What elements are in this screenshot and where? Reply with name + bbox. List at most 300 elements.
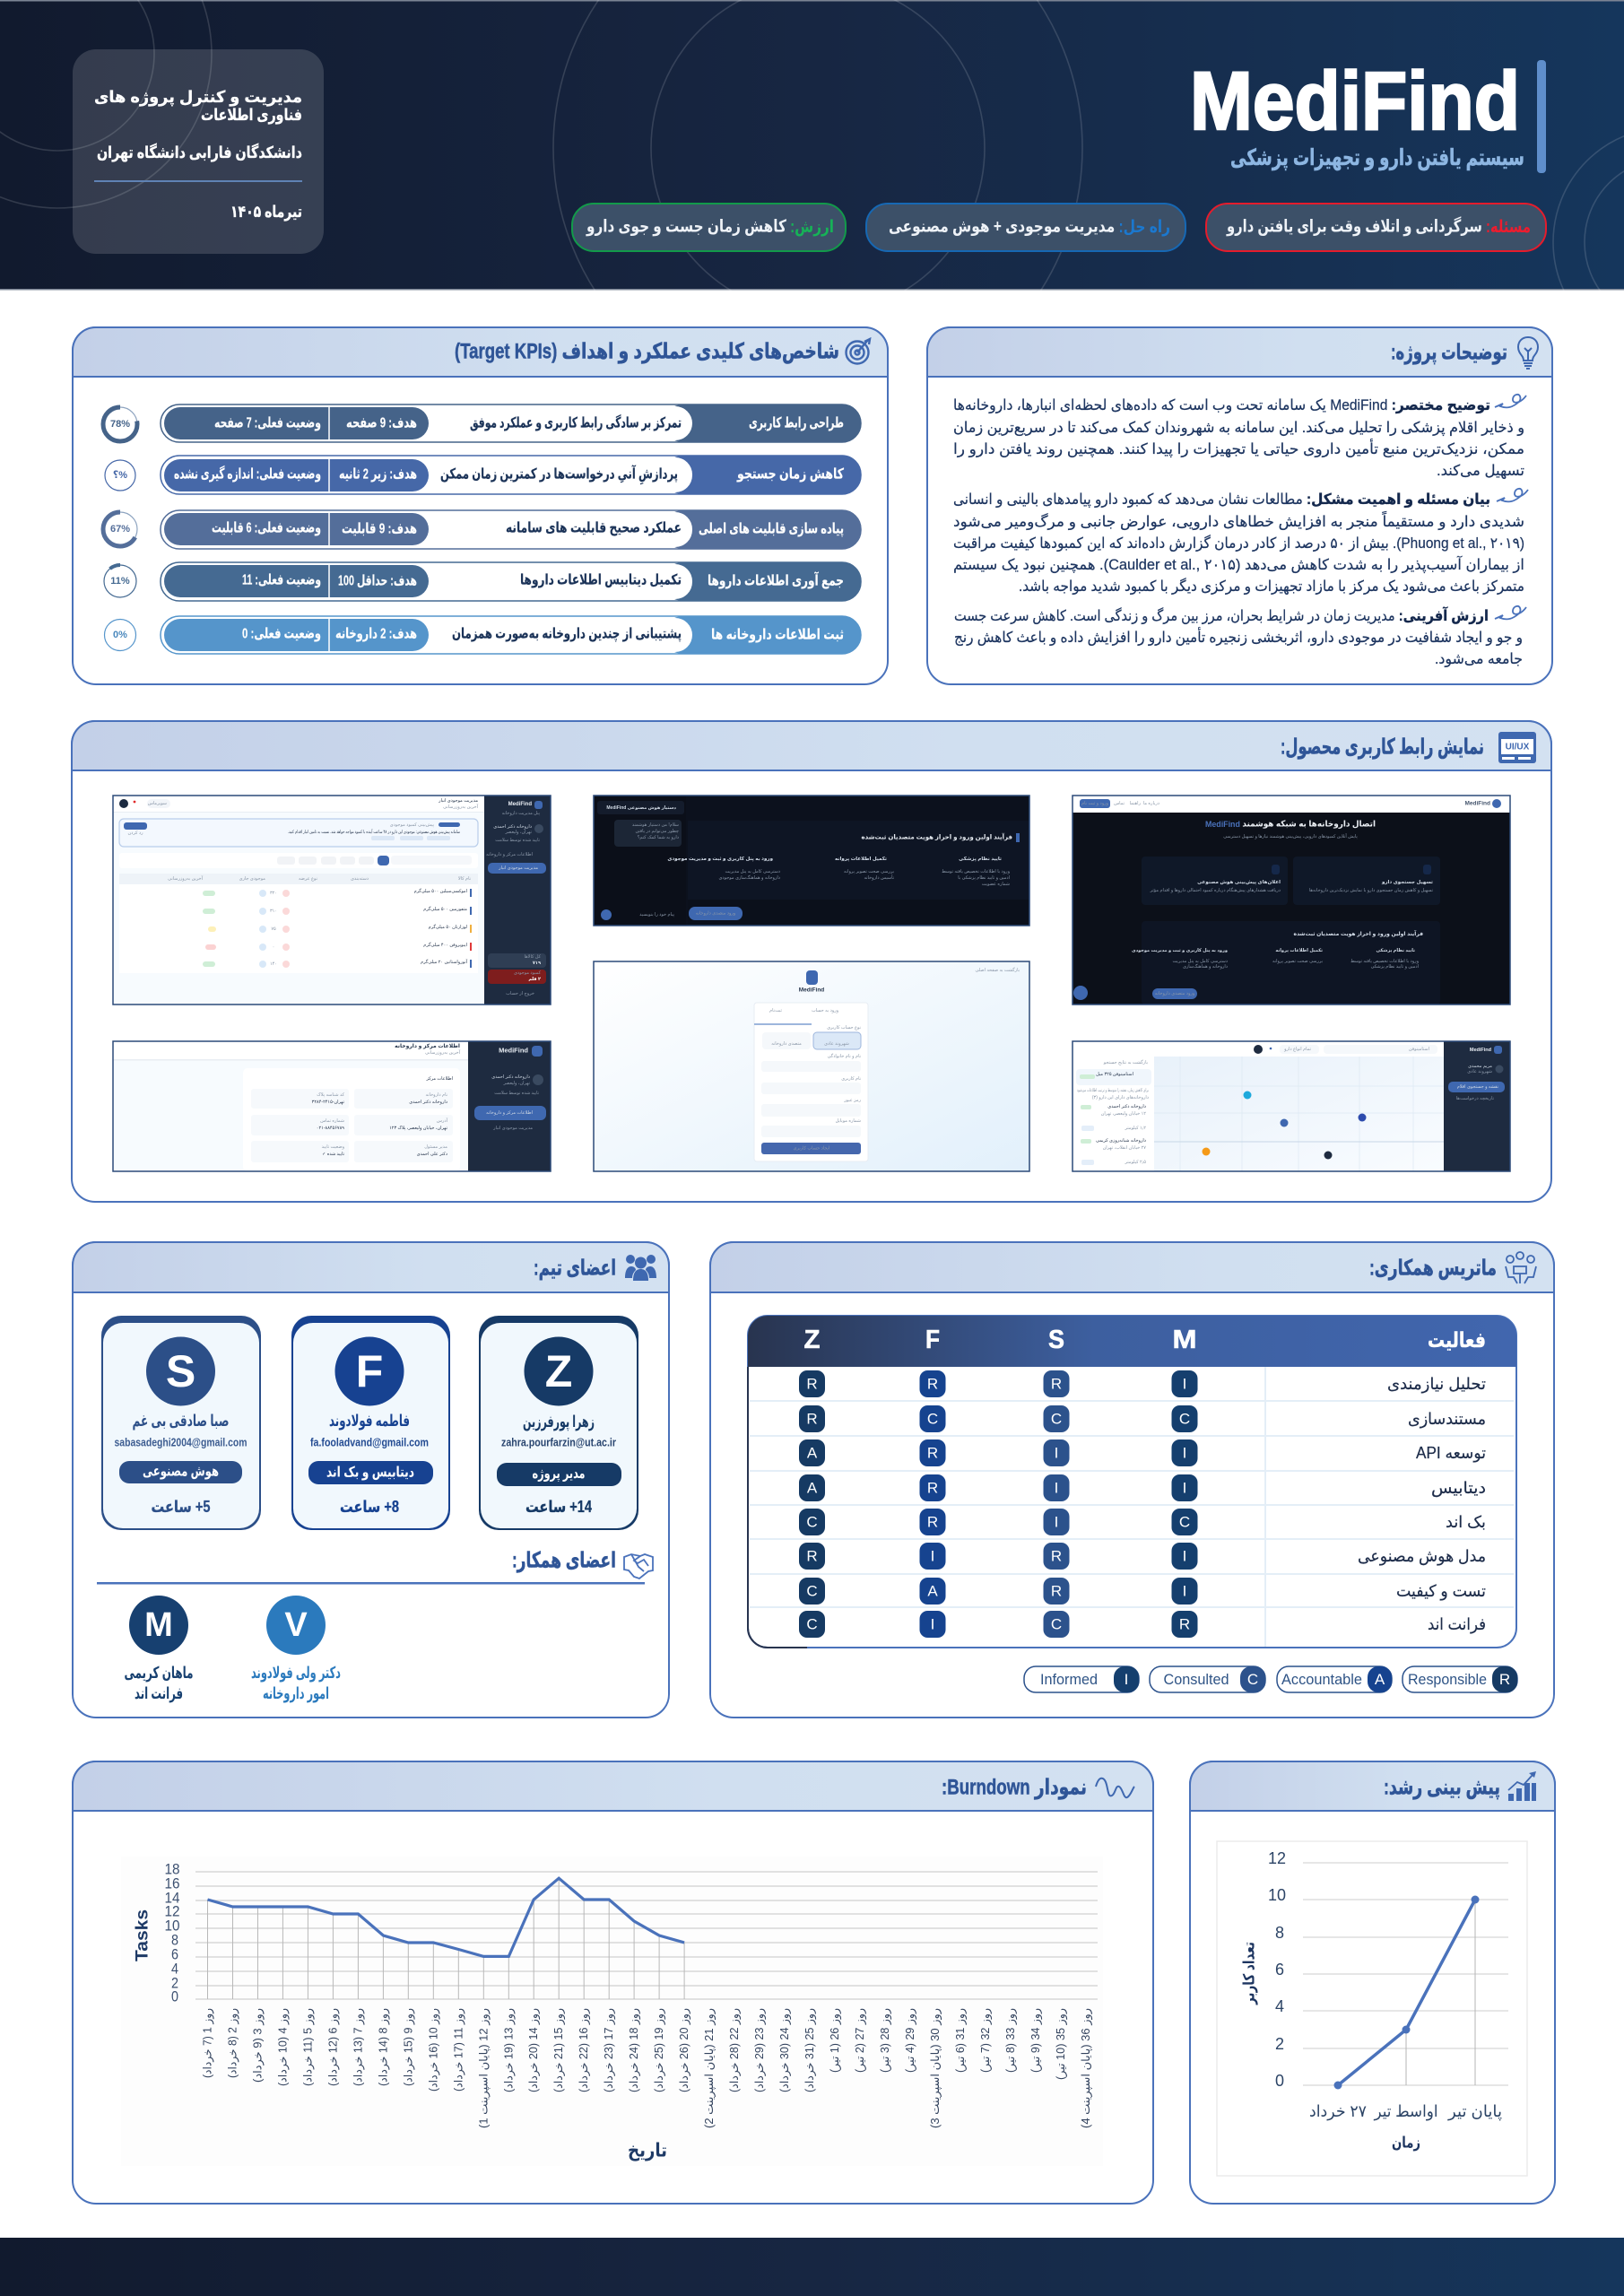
x axis labels: روز 25 (31 خرداد) <box>803 2008 817 2092</box>
x axis labels: روز 24 (30 خرداد) <box>778 2008 792 2092</box>
row labels: تحلیل نیازمندی <box>1387 1375 1486 1393</box>
KPI row 5 <box>161 616 861 654</box>
x axis labels: روز 26 (1 تیر) <box>829 2008 842 2073</box>
screenshot: map search: ۲۷ خیابان انقلاب، تهران <box>1103 1145 1146 1151</box>
screenshot: inventory dashboard: کمبود موجودی <box>514 970 542 976</box>
screenshot: map search: بازگشت به نتایج جستجو <box>1103 1059 1148 1065</box>
x axis labels: روز 4 (10 خرداد) <box>276 2008 290 2086</box>
x axis labels: روز 5 (11 خرداد) <box>301 2008 315 2086</box>
screenshot: inventory dashboard: ۰ <box>273 944 274 950</box>
panel: growth forecast <box>1190 1761 1555 2204</box>
screenshot: inventory dashboard: متفورمین ۵۰۰ میلی‌گرم <box>423 906 467 912</box>
course info card <box>73 49 324 254</box>
column F chips: A <box>927 1582 938 1600</box>
screenshot: landing page: درباره ما <box>1143 801 1159 806</box>
screenshot: landing page <box>1073 796 1510 1004</box>
collaborator: Mahan: فرانت اند <box>135 1684 183 1703</box>
screenshot: map search: داروخانه دکتر احمدی <box>1107 1104 1146 1109</box>
screenshot: landing page: دریافت هشدارهای پیش‌هنگام درباره کمبود احتمالی داروها و اقدام مؤثر <box>1150 887 1281 893</box>
column S chips: R <box>1051 1582 1062 1600</box>
y axis labels: 2 <box>1275 2035 1284 2053</box>
icon: UI/UX window: UI/UX <box>1506 743 1530 752</box>
column S chips: C <box>1051 1616 1062 1632</box>
text: problem statement: (Phuong et al., ۲۰۱۹). بیش از ۵۰ درصد از کادر درمان گزارش داده‌اند که این کمبودها کیفیت مراقبت <box>953 535 1524 552</box>
row labels: مدل هوش مصنوعی <box>1358 1547 1486 1566</box>
screenshot: onboarding process with chat: ورود به پنل کاربری و ثبت و مدیریت موجودی <box>667 856 774 862</box>
x axis labels: روز 36 (پایان اسپرینت 4) <box>1080 2008 1093 2128</box>
KPI row 2: کاهش زمان جستجو <box>736 466 845 483</box>
screenshot: sign-up form <box>594 961 1029 1171</box>
screenshot: pharmacy information: تایید شده ✓ <box>322 1152 345 1157</box>
team card: Saba: ‎+5 ساعت <box>151 1498 210 1516</box>
screenshot: inventory dashboard: پنل مدیریت داروخانه <box>502 811 541 816</box>
y axis labels: 8 <box>171 1932 178 1948</box>
screenshot: pharmacy information: داروخانه دکتر احمدی <box>409 1100 447 1105</box>
screenshot: map search: ۱۲ خیابان ولیعصر، تهران <box>1101 1111 1146 1117</box>
course info card: دانشکدگان فارابی دانشگاه تهران <box>97 143 302 162</box>
legend: Informed <box>1040 1671 1098 1688</box>
screenshot: onboarding process with chat: دسترسی کامل به پنل مدیریت <box>725 869 780 874</box>
KPI row 4: هدف: حداقل 100 <box>338 574 417 588</box>
panel: project description <box>927 327 1552 684</box>
legend: Responsible <box>1408 1671 1487 1688</box>
progress ring 67% <box>103 512 137 546</box>
screenshot: map search: تاریخچه درخواست‌ها <box>1456 1096 1495 1101</box>
course info card: تیرماه ۱۴۰۵ <box>230 203 302 222</box>
x axis labels: روز 30 (پایان اسپرینت 3) <box>929 2008 942 2128</box>
y axis labels: 0 <box>1275 2072 1284 2090</box>
y axis labels: 16 <box>165 1874 179 1892</box>
screenshot: landing page: اتصال داروخانه‌ها به شبکه هوشمند MediFind <box>1205 820 1376 829</box>
KPI row 5: ثبت اطلاعات داروخانه ها <box>711 628 844 642</box>
KPI row 3: عملکرد صحیح قابلیت های سامانه <box>506 520 682 536</box>
column M chips <box>1171 1370 1198 1638</box>
screenshot: map search: ۲٫۵ کیلومتر <box>1125 1160 1146 1165</box>
column F chips <box>920 1370 945 1638</box>
KPI row 3: هدف: 9 قابلیت <box>342 522 417 536</box>
screenshot: sign-up form: شهروند عادی <box>824 1041 849 1047</box>
screenshot: inventory dashboard: ۱۴۰ <box>270 961 277 967</box>
line chart: user growth <box>1217 1841 1527 2176</box>
screenshot: onboarding process with chat: فرآیند اولین ورود و احراز هویت متصدیان ثبت‌شده <box>861 832 1012 841</box>
column M chips: I <box>1183 1376 1186 1392</box>
team card: Zahra: مدیر پروژه <box>533 1466 585 1483</box>
collaborator: Mahan: ماهان کریمی <box>124 1664 194 1683</box>
burndown line <box>208 1878 684 1956</box>
screenshot: inventory dashboard: ۳۱۰ <box>270 909 277 914</box>
icon: team <box>625 1255 656 1281</box>
team card: Saba <box>101 1316 261 1530</box>
x axis labels: روز 34 (9 تیر) <box>1029 2008 1043 2073</box>
x axis labels: روز 7 (13 خرداد) <box>352 2008 365 2086</box>
subtitle: سیستم یافتن دارو و تجهیزات پزشکی <box>1230 145 1524 171</box>
x axis labels: روز 3 (9 خرداد) <box>251 2008 265 2083</box>
collaborator: Dr. Vali: دکتر ولی فولادوند <box>251 1664 341 1683</box>
pill: solution: راه حل: مدیریت موجودی + هوش مصنوعی <box>889 217 1170 237</box>
icon: target <box>847 339 870 364</box>
screenshot: inventory dashboard: نام کالا <box>458 876 471 882</box>
collaborator: Dr. Vali: امور داروخانه <box>263 1684 329 1703</box>
screenshot: pharmacy information: ۰۲۱-۸۸۴۵۶۷۸۹ <box>317 1126 344 1131</box>
x axis labels: روز 12 (پایان اسپرینت 1) <box>477 2008 491 2128</box>
screenshot: onboarding process with chat: تکمیل اطلاعات پروانه <box>835 856 887 862</box>
screenshot: sign-up form: رمز عبور <box>843 1098 862 1103</box>
course info card: فناوری اطلاعات <box>201 106 302 125</box>
screenshot: landing page: داروخانه و هماهنگ‌سازی <box>1183 963 1228 970</box>
screenshot: pharmacy information: مدیریت موجودی انبار <box>492 1126 533 1131</box>
heading: burndown: نمودار Burndown: <box>942 1776 1087 1799</box>
text: short description: تسهیل می‌کند. <box>1437 463 1524 480</box>
column S chips: R <box>1051 1376 1062 1392</box>
team card: Zahra: ‎+14 ساعت <box>525 1498 592 1516</box>
team card: Saba: هوش مصنوعی <box>143 1464 219 1480</box>
icon: burndown curve <box>1096 1779 1134 1797</box>
RACI table <box>748 1316 1516 1648</box>
KPI row 1: هدف: 9 صفحه <box>346 416 417 430</box>
x axis labels: روز 20 (26 خرداد) <box>678 2008 691 2092</box>
column Z chips: R <box>806 1548 818 1564</box>
column M chips: R <box>1179 1616 1190 1632</box>
table header row: M <box>1173 1326 1196 1354</box>
KPI row 4: وضعیت فعلی: 11 <box>242 572 321 588</box>
KPI row 1 <box>161 404 861 442</box>
x axis labels: روز 1 (7 خرداد) <box>201 2008 215 2078</box>
x axis labels: روز 33 (8 تیر) <box>1004 2008 1018 2073</box>
pill: value <box>572 204 846 251</box>
team card: Zahra: زهرا پورفرزین <box>523 1413 595 1431</box>
screenshot: inventory dashboard: داروخانه دکتر احمدی <box>493 824 532 830</box>
column M chips: I <box>1183 1444 1186 1462</box>
screenshot: pharmacy information: تهران-۲۴۱۵-۳۲۸۴ <box>312 1100 345 1105</box>
heading: KPIs: شاخص‌های کلیدی عملکرد و اهداف (Target KPIs) <box>455 339 839 364</box>
screenshot: inventory dashboard <box>113 796 551 1004</box>
screenshot: inventory dashboard: آخرین به‌روزرسانی <box>168 875 204 882</box>
column M chips: I <box>1183 1480 1186 1496</box>
screenshot: pharmacy information: MediFind <box>499 1046 528 1055</box>
heading: team: اعضای تیم: <box>534 1256 616 1281</box>
screenshot: onboarding process with chat: چطور می‌توانم در یافتن <box>635 829 679 834</box>
x axis title: تاریخ <box>628 2140 667 2161</box>
screenshot: landing page: اعلان‌های پیش‌بینی هوش مصنوعی <box>1197 880 1281 885</box>
KPI row 5: هدف: 2 داروخانه <box>335 626 417 642</box>
column Z chips: R <box>806 1410 818 1428</box>
screenshot: onboarding process with chat: بررسی صحت تصویر پروانه <box>844 869 894 874</box>
x axis labels: روز 28 (3 تیر) <box>879 2008 892 2073</box>
table header row: فعالیت <box>1428 1328 1486 1352</box>
x axis labels: روز 23 (29 خرداد) <box>753 2008 767 2092</box>
screenshot: inventory dashboard: ایبوپروفن ۴۰۰ میلی‌گرم <box>423 942 467 948</box>
screenshot: pharmacy information <box>113 1041 551 1171</box>
screenshot: landing page: ورود متصدی داروخانه <box>1155 991 1195 996</box>
heading: collaboration matrix: ماتریس همکاری: <box>1369 1256 1497 1281</box>
team card: Fatemeh <box>291 1316 450 1530</box>
team card: Zahra: zahra.pourfarzin@ut.ac.ir <box>501 1435 616 1449</box>
screenshot: landing page: ادمین و تایید نظام پزشکی <box>1371 964 1419 970</box>
screenshot: landing page: تسهیل و کاهش زمان جستجوی دارو با نمایش نزدیک‌ترین داروخانه‌ها <box>1309 888 1434 893</box>
screenshot: sign-up form: متصدی داروخانه <box>771 1041 802 1047</box>
screenshot: onboarding process with chat: پیام خود را بنویسید <box>639 912 675 918</box>
x axis labels: روز 19 (25 خرداد) <box>653 2008 666 2092</box>
row labels: تست و کیفیت <box>1396 1582 1486 1601</box>
KPI row 4 <box>161 562 861 601</box>
legend: A <box>1375 1671 1385 1688</box>
icon: swirl 3 <box>1495 606 1526 619</box>
y axis labels: 4 <box>1275 1997 1284 2015</box>
screenshot: sign-up form: MediFind <box>799 987 824 994</box>
screenshot: pharmacy information: آدرس <box>437 1118 448 1124</box>
screenshot: onboarding process with chat: سلام! من دستیار هوشمند <box>632 822 679 828</box>
column F chips: R <box>927 1480 938 1496</box>
screenshot: map search: نقشه و جستجوی اقلام <box>1457 1084 1498 1090</box>
screenshot: onboarding process with chat: تأسیس داروخانه <box>864 874 895 881</box>
table header row <box>803 1326 1486 1354</box>
panel: burndown chart <box>73 1761 1153 2204</box>
KPI row 1: تمرکز بر سادگی رابط کاربری و عملکرد موفق <box>470 414 682 430</box>
screenshot: sign-up form: نام کاربری <box>841 1076 861 1082</box>
x axis labels: روز 18 (24 خرداد) <box>628 2008 641 2092</box>
screenshot: map search: استامینوفن <box>1409 1047 1429 1052</box>
screenshot: landing page: ورود به پنل کاربری و ثبت و مدیریت موجودی <box>1132 948 1228 953</box>
screenshot: landing page: پایش آنلاین کمبودهای دارویی، پیش‌بینی هوشمند نیازها و تسهیل دسترسی <box>1223 833 1358 839</box>
screenshot: map search: برای کاهش زمان، نقشه را متوسط و ترتیب اطلاعات می‌شود <box>1077 1088 1149 1093</box>
team card: Zahra: Z <box>545 1346 572 1396</box>
screenshot: sign-up form: ثبت‌نام <box>769 1008 783 1013</box>
x axis labels: روز 9 (15 خرداد) <box>402 2008 415 2086</box>
x axis labels: روز 21 (پایان اسپرینت 2) <box>703 2008 716 2128</box>
screenshot: landing page: ورود و ثبت نام <box>1081 801 1109 806</box>
row labels: مستندسازی <box>1408 1410 1486 1428</box>
screenshot: pharmacy information: دکتر علی احمدی <box>417 1152 447 1157</box>
screenshot: onboarding process with chat: شماره عضویت <box>982 882 1010 887</box>
column Z chips: C <box>806 1616 818 1632</box>
KPI row 2 <box>161 456 861 494</box>
column S chips: R <box>1051 1548 1062 1564</box>
pill: value: ارزش: کاهش زمان جست و جوی دارو <box>586 217 834 237</box>
screenshot: inventory dashboard: ۷۵ <box>271 926 276 932</box>
KPI row 4: تکمیل دیتابیس اطلاعات داروها <box>520 572 682 588</box>
x axis labels <box>1309 2102 1502 2121</box>
column S chips <box>1044 1370 1069 1638</box>
x axis labels: روز 14 (20 خرداد) <box>527 2008 541 2092</box>
heading: product UI: نمایش رابط کاربری محصول: <box>1281 735 1484 759</box>
column S chips: I <box>1055 1480 1058 1496</box>
screenshot: map search: تمام انواع دارو <box>1283 1047 1312 1052</box>
screenshot: inventory dashboard: خروج از حساب <box>506 991 534 996</box>
column Z chips: C <box>806 1582 818 1600</box>
y axis labels: 14 <box>165 1889 179 1907</box>
screenshot: map search <box>1073 1041 1510 1171</box>
screenshot: landing page: MediFind <box>1464 800 1490 807</box>
screenshot: inventory dashboard: مدیریت موجودی انبار <box>498 865 538 871</box>
screenshot: pharmacy information: آخرین به‌روزرسانی <box>425 1049 461 1056</box>
x axis labels: روز 17 (23 خرداد) <box>603 2008 616 2092</box>
screenshot: landing page: بررسی صحت تصویر پروانه <box>1272 959 1323 964</box>
collaborator: Dr. Vali: V <box>284 1606 308 1644</box>
screenshot: inventory dashboard: آخرین به‌روزرسانی <box>443 804 479 810</box>
panel: collaboration matrix <box>710 1242 1554 1718</box>
screenshot: landing page: فرآیند اولین ورود و احراز هویت متصدیان ثبت‌شده <box>1294 929 1423 937</box>
screenshot: inventory dashboard: اموکسی‌سیلین ۵۰۰ میلی‌گرم <box>414 888 467 894</box>
y axis labels: 6 <box>171 1946 178 1962</box>
screenshot: sign-up form: نوع حساب کاربری <box>827 1025 861 1031</box>
panel: product UI showcase <box>72 721 1551 1202</box>
screenshot: inventory dashboard: آتورواستاتین ۲۰ میلی‌گرم <box>421 959 468 965</box>
KPI row 3 <box>161 510 861 549</box>
KPI row 2: وضعیت فعلی: اندازه گیری نشده <box>174 465 321 483</box>
screenshot: inventory dashboard: دسته‌بندی <box>351 876 369 882</box>
header banner <box>0 0 1624 413</box>
row labels: توسعه API <box>1416 1444 1486 1463</box>
screenshot: inventory dashboard: پیش‌بینی کمبود موجودی <box>390 822 435 828</box>
screenshot: map search: داروخانه‌های دارای این دارو (۳) <box>1092 1095 1149 1100</box>
screenshot: inventory dashboard: مدیریت موجودی انبار <box>438 798 478 804</box>
text: short description <box>953 397 1524 480</box>
icon: UI/UX window <box>1498 732 1536 763</box>
y axis labels: 2 <box>171 1975 178 1991</box>
screenshot: landing page: تکمیل اطلاعات پروانه <box>1275 948 1323 953</box>
table header row: Z <box>803 1326 820 1354</box>
screenshot: inventory dashboard: اطلاعات مرکز و داروخانه <box>486 852 533 857</box>
legend: R <box>1499 1671 1510 1688</box>
screenshot: onboarding process with chat <box>594 796 1029 926</box>
screenshot: landing page: تماس <box>1114 801 1125 806</box>
progress ring 11% <box>104 565 136 597</box>
x axis labels: روز 8 (14 خرداد) <box>377 2008 390 2086</box>
progress ring unknown <box>105 460 135 491</box>
column M chips: C <box>1179 1514 1190 1530</box>
screenshot: pharmacy information: مدیر مسئول <box>424 1144 447 1150</box>
legend: Consulted <box>1164 1671 1229 1688</box>
team card: Fatemeh: فاطمه فولادوند <box>329 1412 410 1431</box>
title accent bar <box>1537 60 1546 173</box>
screenshot: onboarding process with chat: دستیار هوش مصنوعی MediFind <box>606 805 676 811</box>
heading: growth forecast: پیش بینی رشد: <box>1384 1776 1500 1799</box>
row labels: دیتابیس <box>1431 1479 1486 1497</box>
column F chips: R <box>927 1444 938 1462</box>
screenshot: map search: استامینوفن ۳۲۵ میل <box>1096 1072 1133 1077</box>
icon: handshake <box>624 1554 653 1578</box>
team card: Saba: صبا صادقی بی غم <box>133 1412 230 1430</box>
pill: problem: مسئله: سرگردانی و اتلاف وقت برای یافتن دارو <box>1226 215 1531 237</box>
team card: Saba: S <box>166 1346 195 1396</box>
progress ring 78% <box>103 407 137 441</box>
column M chips: C <box>1179 1410 1190 1428</box>
subheading: collaborators: اعضای همکار: <box>512 1548 616 1573</box>
screenshot: sign-up form: نام و نام خانوادگی <box>828 1053 861 1059</box>
x axis labels: اواسط تیر <box>1374 2102 1438 2121</box>
column Z chips: A <box>807 1480 818 1496</box>
screenshot: pharmacy information: شماره تماس <box>320 1118 344 1124</box>
y axis labels <box>1268 1849 1286 2090</box>
icon: light bulb <box>1518 337 1538 369</box>
text: short description: و ذخایر اقلام پزشکی را تحلیل می‌کند. این سامانه به شهروندان کمک می‌کند تا در سریع‌ترین زمان <box>953 420 1524 437</box>
panel: team members <box>73 1242 669 1718</box>
column F chips: I <box>931 1548 934 1564</box>
screenshot: inventory dashboard: کل کالاها <box>525 954 542 960</box>
screenshot: pharmacy information: کد شناسه پلاک <box>317 1091 345 1098</box>
screenshot: landing page: تایید نظام پزشکی <box>1376 948 1415 953</box>
column S chips: C <box>1051 1410 1062 1428</box>
column F chips: R <box>927 1514 938 1530</box>
screenshot: landing page: تسهیل جستجوی دارو <box>1381 880 1433 885</box>
screenshot: sign-up form: ورود به حساب <box>812 1008 839 1013</box>
row labels <box>1358 1375 1486 1634</box>
y axis labels: 10 <box>1268 1886 1286 1904</box>
text: problem statement: متمرکز باعث می‌شود یک مرکز با مازاد تجهیزات و مرکزی دیگر با کمبود شدید مواجه باشد. <box>1019 578 1524 596</box>
text: value creation: جامعه می‌شود. <box>1435 651 1523 668</box>
progress ring 0% <box>104 619 136 651</box>
text: value creation <box>954 605 1523 668</box>
progress ring 0%: 0% <box>113 630 127 640</box>
icon: growth bars <box>1508 1771 1536 1801</box>
screenshot: pharmacy information: تهران، خیابان ولیعصر، پلاک ۱۲۳ <box>389 1125 448 1131</box>
x axis labels: روز 35 (10 تیر) <box>1055 2008 1068 2080</box>
data line <box>1334 1896 1480 2090</box>
text: problem statement: بیان مسئله و اهمیت مشکل: مطالعات نشان می‌دهد که کمبود دارو پیامدهای بالینی و انسانی <box>953 491 1490 509</box>
screenshot: landing page: دسترسی کامل به پنل مدیریت <box>1173 959 1228 964</box>
icon: swirl 1 <box>1495 395 1526 407</box>
x axis labels: روز 11 (17 خرداد) <box>452 2008 465 2092</box>
table header row: S <box>1048 1326 1064 1354</box>
progress ring 67%: 67% <box>110 524 130 535</box>
KPI row 2: هدف: زیر 2 ثانیه <box>339 466 417 483</box>
screenshot: map search: مریم محمدی <box>1468 1064 1492 1069</box>
team card: Saba: sabasadeghi2004@gmail.com <box>115 1435 248 1449</box>
screenshot: pharmacy information: تایید شده توسط سلامت <box>494 1091 540 1096</box>
legend: C <box>1247 1671 1258 1688</box>
screenshot: inventory dashboard: تایید شده توسط سلامت <box>495 838 541 843</box>
screenshot: inventory dashboard: تهران، ولیعصر <box>505 830 533 835</box>
screenshot: pharmacy information: داروخانه دکتر احمدی <box>491 1074 530 1080</box>
pill: problem <box>1206 204 1546 251</box>
text: short description: ممکن، نزدیک‌ترین منبع تأمین داروی حیاتی یا تجهیزات را پیدا کنند. همچنین روند یافتن دارو را <box>953 439 1524 458</box>
x axis labels: روز 27 (2 تیر) <box>854 2008 867 2073</box>
text: value creation: ارزش آفرینی: مدیریت زمان در شرایط بحران، مرز بین مرگ و زندگی است. کاهش سرعت جست <box>954 605 1489 625</box>
text: short description: توضیح مختصر: MediFind یک سامانه تحت وب است که داده‌های لحظه‌ای انبارها، داروخانه‌ها <box>953 397 1490 414</box>
x axis labels: روز 2 (8 خرداد) <box>226 2008 240 2078</box>
x axis labels: روز 29 (4 تیر) <box>904 2008 917 2073</box>
screenshot: inventory dashboard: ۲ قلم <box>528 977 541 982</box>
text: problem statement: از بیماران آسیب‌پذیر را به شدت کاهش می‌دهد (Caulder et al., ۲۰۱۵). همچنین نبود یک سیستم <box>953 556 1524 574</box>
collaborator: Mahan: M <box>144 1606 173 1644</box>
y axis labels: 4 <box>171 1961 178 1977</box>
screenshot: inventory dashboard: سوپرماس <box>148 801 167 806</box>
screenshot: inventory dashboard: موجودی جاری <box>239 876 265 882</box>
column Z chips <box>799 1370 825 1638</box>
progress ring 11%: 11% <box>110 576 130 587</box>
column S chips: I <box>1055 1514 1058 1530</box>
collaborator: Dr. Vali <box>251 1596 341 1703</box>
screenshot: inventory dashboard: سامانه پیش‌بینی هوش مصنوعی: موجودی این دارو در ۴۸ ساعت آینده با کمبود مواجه خواهد شد. نسبت به تامین انبار اقدام کنید. <box>288 829 460 835</box>
screenshot: inventory dashboard: رد کردن <box>127 831 143 836</box>
x axis labels: روز 10 (16 خرداد) <box>427 2008 440 2092</box>
KPI row 5: پشتیبانی از چندین داروخانه به‌صورت همزمان <box>452 626 682 642</box>
course info card: مدیریت و کنترل پروژه های <box>94 88 302 107</box>
legend: Accountable <box>1281 1671 1362 1688</box>
screenshot: onboarding process with chat: دارو به شما کمک کنم؟ <box>638 835 679 840</box>
line chart: burndown <box>121 1857 1103 2166</box>
KPI row 4: جمع آوری اطلاعات داروها <box>708 570 844 588</box>
screenshot: pharmacy information: اطلاعات مرکز <box>425 1076 453 1082</box>
screenshot: inventory dashboard: نوع عرضه <box>299 876 317 882</box>
collaborator: Mahan <box>124 1596 194 1703</box>
x axis labels: روز 31 (6 تیر) <box>954 2008 968 2073</box>
x axis labels: روز 22 (28 خرداد) <box>728 2008 742 2092</box>
legend: I <box>1125 1671 1128 1688</box>
text: value creation: و جو و ایجاد شفافیت در موجودی دارو، اثربخشی زنجیره تأمین دارو را افزایش داده و باعث کاهش رنج <box>954 627 1523 647</box>
screenshot: pharmacy information: نام داروخانه <box>425 1092 447 1098</box>
KPI row 2: پردازشِ آنیِ درخواست‌ها در کمترین زمان ممکن <box>440 465 678 485</box>
